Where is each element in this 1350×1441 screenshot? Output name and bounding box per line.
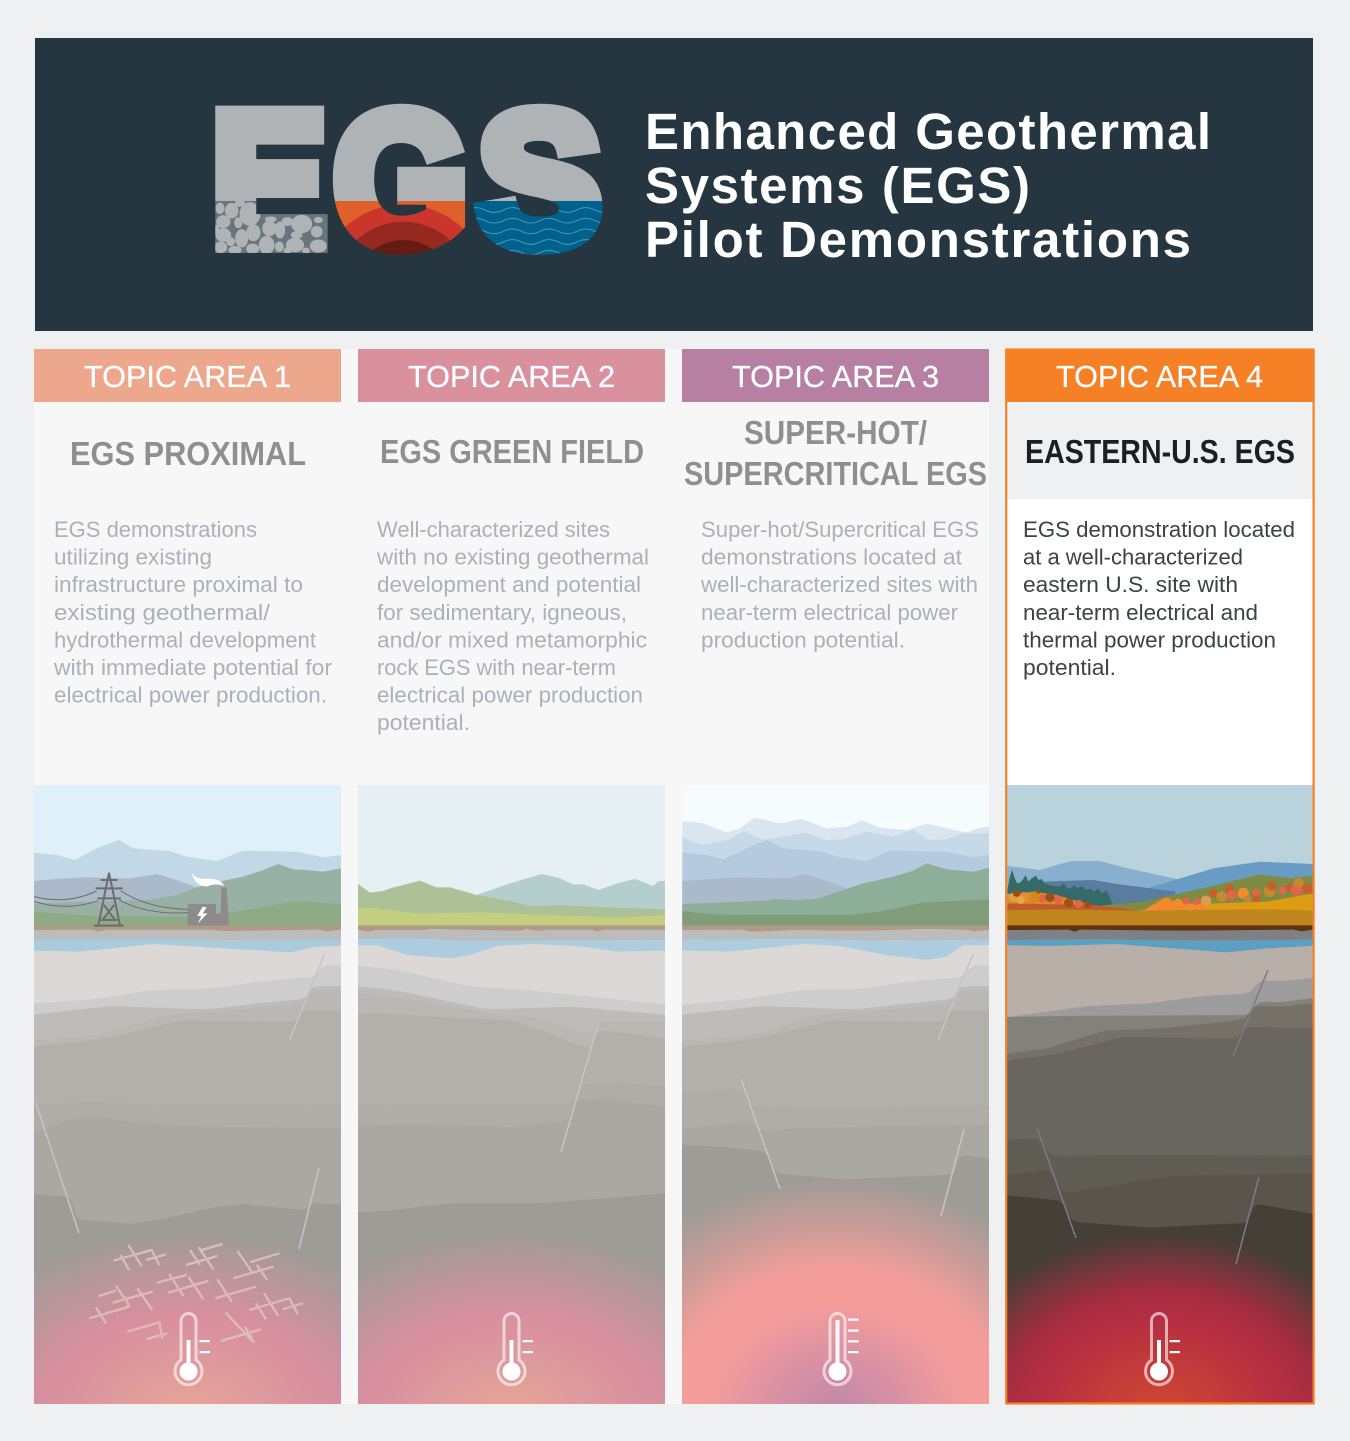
text block: topic 4 description: EGS demonstration located: [1023, 517, 1295, 542]
text block: topic 2 description: potential.: [377, 710, 470, 735]
topic area 3 header: TOPIC AREA 3: [732, 359, 939, 394]
heading: EGS green field: EGS GREEN FIELD: [380, 433, 644, 470]
text block: topic 2 description: electrical power production: [377, 682, 643, 708]
text block: topic 3 description: [700, 517, 979, 652]
icon: thermometer: [498, 1314, 533, 1385]
muted backdrop for topic areas 1 to 3: [34, 349, 989, 1404]
text block: topic 3 description: production potential.: [701, 628, 905, 652]
text block: topic 2 description: development and potential: [377, 572, 641, 597]
text block: topic 1 description: with immediate potential for: [53, 655, 333, 680]
topic area 3 header: [682, 349, 989, 402]
illustration: green field landscape and cross-section: [358, 785, 665, 1404]
topic area 4 header: TOPIC AREA 4: [1056, 359, 1263, 394]
text block: topic 3 description: demonstrations located at: [701, 544, 963, 570]
icon: transmission tower: [34, 873, 188, 926]
text block: topic 2 description: [376, 517, 649, 735]
conifer tree line: [1007, 869, 1113, 908]
topic area 1 header: [34, 349, 341, 402]
panel: topic area 2: [358, 349, 665, 1404]
fault lines: [1037, 970, 1268, 1264]
fault lines: [741, 954, 973, 1216]
text block: topic 2 description: with no existing geothermal: [376, 544, 649, 570]
text block: topic 1 description: utilizing existing: [54, 544, 212, 570]
heading: eastern U.S. EGS: EASTERN-U.S. EGS: [1025, 433, 1295, 470]
topic area 4 header: [1006, 349, 1314, 402]
text block: topic 3 description: Super-hot/Supercritical EGS: [701, 517, 979, 542]
logo letter S with waves: [472, 104, 602, 255]
text block: topic 4 description: potential.: [1023, 655, 1116, 680]
text block: topic 1 description: electrical power production.: [54, 682, 327, 708]
heat glow: [358, 1225, 665, 1404]
text block: topic 4 description: eastern U.S. site with: [1023, 572, 1238, 597]
heat glow: [1007, 1230, 1313, 1404]
autumn foliage: [1009, 878, 1312, 908]
illustration: mountain range landscape and cross-section: [682, 818, 989, 1404]
text block: topic 4 description: near-term electrical and: [1023, 600, 1258, 625]
illustration: autumn eastern landscape and dark cross-section: [1007, 785, 1312, 1402]
heat glow: [34, 1225, 341, 1404]
engineered fracture network: [89, 1244, 303, 1343]
title: Systems (EGS): [645, 157, 1030, 214]
text block: topic 4 description: thermal power production: [1023, 628, 1276, 652]
title: [645, 103, 1211, 268]
header banner: [35, 38, 1313, 331]
text block: topic 4 description: at a well-characterized: [1023, 544, 1243, 570]
text block: topic 2 description: and/or mixed metamorphic: [377, 628, 647, 652]
text block: topic 4 description: [1023, 517, 1295, 680]
text block: topic 3 description: near-term electrical power: [701, 600, 958, 625]
panel: topic area 1: [34, 349, 341, 1404]
logo letter G with magma arcs: [332, 104, 466, 255]
text block: topic 2 description: rock EGS with near-term: [377, 655, 616, 680]
icon: thermometer: [824, 1314, 858, 1385]
heat glow: [682, 1175, 989, 1404]
logo letter E with cobbles: [215, 106, 328, 253]
topic area 2 header: TOPIC AREA 2: [408, 359, 615, 394]
text block: topic 1 description: hydrothermal development: [54, 628, 317, 652]
topic area 2 header: [358, 349, 665, 402]
title: Pilot Demonstrations: [645, 211, 1191, 268]
icon: power plant with smoke: [188, 870, 229, 926]
heading: super-hot / supercritical EGS: SUPER-HOT/: [744, 414, 927, 451]
heading: super-hot / supercritical EGS: [684, 414, 987, 492]
heading: super-hot / supercritical EGS: SUPERCRITICAL EGS: [684, 455, 987, 492]
text block: topic 1 description: infrastructure proximal to: [54, 572, 303, 597]
text block: topic 1 description: [53, 517, 333, 708]
fault line: [561, 1021, 599, 1152]
heading: EGS proximal: EGS PROXIMAL: [70, 435, 306, 472]
topic area 1 header: TOPIC AREA 1: [84, 359, 291, 394]
panel: topic area 4: [1005, 348, 1315, 1405]
title: Enhanced Geothermal: [645, 103, 1211, 160]
text block: topic 1 description: EGS demonstrations: [54, 517, 257, 542]
icon: thermometer: [175, 1314, 210, 1385]
panel: topic area 3: [664, 349, 1011, 1407]
fault lines: [36, 955, 324, 1249]
text block: topic 2 description: for sedimentary, igneous,: [377, 600, 627, 625]
text block: topic 1 description: existing geothermal/: [54, 600, 271, 625]
EGS logo: [215, 104, 602, 255]
text block: topic 2 description: Well-characterized sites: [377, 517, 610, 542]
icon: thermometer: [1146, 1314, 1180, 1385]
illustration: geothermal plant landscape and cross-section with fractures: [34, 785, 341, 1404]
text block: topic 3 description: well-characterized sites with: [700, 572, 978, 597]
